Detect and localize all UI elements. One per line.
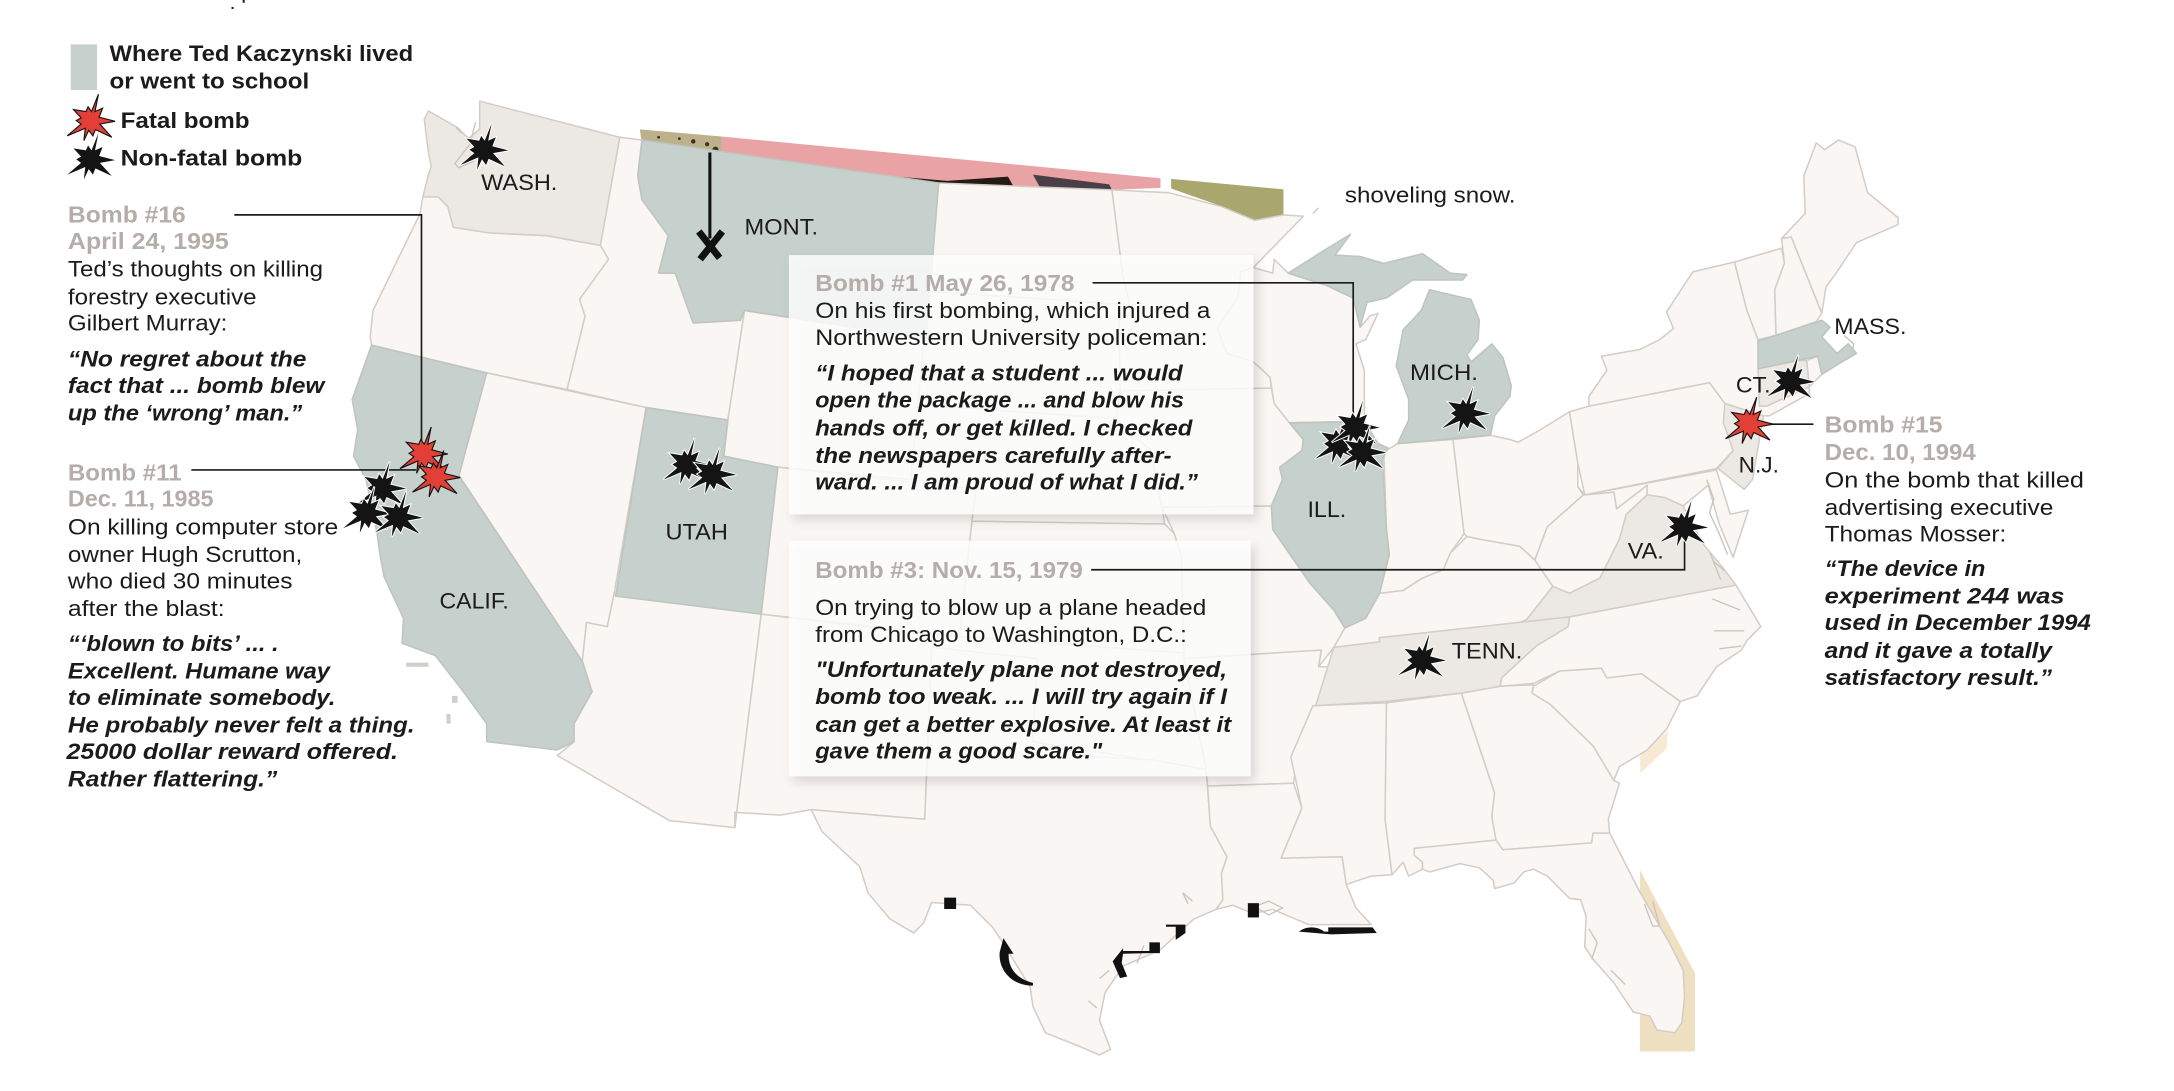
montana marker: arrow line and X [699, 152, 722, 259]
panel: bomb 11: to eliminate somebody. [68, 685, 336, 710]
panel: bomb 3: bomb too weak. ... I will try again if I [815, 684, 1228, 709]
state: Kentucky [1334, 536, 1553, 647]
panel: bomb 15: used in December 1994 [1825, 610, 2091, 635]
state: Washington [423, 101, 620, 245]
state: New Hampshire [1775, 237, 1822, 335]
bomb: Michigan [1442, 387, 1490, 433]
state: Mississippi [1281, 703, 1392, 884]
state: Nevada [459, 373, 646, 661]
panel: bomb 1: hands off, or get killed. I checked [815, 415, 1193, 440]
state: South Carolina [1532, 668, 1680, 780]
panel: bomb 15: satisfactory result.” [1825, 665, 2053, 690]
panel: bomb 3: gave them a good scare." [814, 738, 1103, 763]
panel: bomb 15: experiment 244 was [1825, 584, 2064, 609]
state: New York [1589, 262, 1809, 416]
state: Oregon [370, 197, 609, 390]
state labels: MASS. [1834, 314, 1906, 339]
legend text: lived: or went to school [110, 69, 309, 94]
state: Maine [1782, 140, 1898, 313]
state: Maryland and Delaware [1585, 470, 1748, 557]
state: Wisconsin [1217, 259, 1378, 423]
panel: bomb 15: Dec. 10, 1994 [1825, 439, 1976, 465]
panel: bomb 16: Bomb #16 [68, 201, 186, 227]
panel: bomb 15: advertising executive [1825, 495, 2053, 520]
state: Alabama [1385, 693, 1496, 876]
state: Missouri [1162, 506, 1345, 667]
panel: bomb 11: Rather flattering.” [68, 767, 278, 792]
legend text: non-fatal: Non-fatal bomb [121, 146, 302, 171]
state labels: MICH. [1410, 360, 1478, 385]
panel: bomb 3: "Unfortunately plane not destroyed, [815, 657, 1227, 682]
state: Idaho [567, 137, 745, 420]
bomb markers [343, 123, 1815, 680]
panel: bomb 16: Ted’s thoughts on killing [68, 257, 323, 282]
bomb: Illinois group [1315, 401, 1386, 472]
state: Arkansas [1184, 650, 1339, 786]
panel: bomb 11: He probably never felt a thing. [68, 713, 415, 738]
icon: non-fatal bomb [67, 133, 115, 179]
state: Florida [1414, 833, 1685, 1033]
islands [406, 663, 458, 724]
state labels: WASH. [481, 170, 557, 195]
icon: fatal bomb [67, 94, 115, 141]
panel: bomb 1: On his first bombing, which injured a [815, 298, 1211, 323]
panel: bomb 16: “No regret about the [68, 347, 306, 372]
state: Oklahoma [932, 635, 1206, 769]
state: Utah [616, 408, 778, 614]
state: Indiana [1380, 439, 1464, 593]
panel: bomb 1: Northwestern University policeman: [815, 325, 1208, 350]
panel: bomb 16: Gilbert Murray: [68, 311, 227, 336]
stray caption fragment: shoveling snow. [1345, 182, 1515, 207]
panel: bomb 1: the newspapers carefully after- [815, 443, 1172, 468]
state labels: VA. [1628, 539, 1664, 564]
panel: bomb 15 [1825, 412, 2091, 690]
state labels: ILL. [1307, 497, 1346, 522]
state: North Dakota [929, 183, 1130, 305]
bomb: Connecticut [1767, 355, 1815, 401]
state labels: CALIF. [440, 589, 509, 614]
panel: bomb 11: On killing computer store [68, 514, 338, 539]
panel: bomb 1: “I hoped that a student ... would [815, 361, 1183, 386]
state: Wyoming [724, 311, 926, 480]
bomb: Virginia [1660, 500, 1708, 547]
bomb: California non-fatal group [343, 462, 423, 537]
state labels: TENN. [1452, 638, 1522, 663]
top edge specks [232, 0, 245, 9]
panel: bomb 11: who died 30 minutes [67, 568, 293, 593]
state: Illinois [1271, 421, 1389, 628]
bomb: Utah group [663, 438, 736, 494]
panel: bomb 1: open the package ... and blow his [815, 388, 1184, 413]
panel: bomb 11: 25000 dollar reward offered. [65, 739, 398, 764]
panel: bomb 15: On the bomb that killed [1825, 467, 2084, 492]
panel: bomb 1 [789, 255, 1253, 514]
panel: bomb 3: can get a better explosive. At least it [815, 712, 1233, 737]
state: Montana [638, 140, 939, 338]
state: Georgia [1461, 685, 1619, 850]
panel: bomb 1: ward. ... I am proud of what I did.” [815, 469, 1199, 494]
bomb: Tennessee [1398, 634, 1446, 680]
state: New Mexico [735, 614, 932, 828]
panel: bomb 15: “The device in [1825, 556, 1985, 581]
state: Nebraska [911, 405, 1165, 524]
text fragments on the gulf coast [944, 898, 1377, 986]
state labels: CT. [1736, 372, 1771, 397]
leader lines [191, 215, 1814, 570]
panel: bomb 11: after the blast: [68, 596, 225, 621]
panel: bomb 15: Bomb #15 [1825, 412, 1943, 438]
panel: bomb 3: from Chicago to Washington, D.C.: [815, 622, 1187, 647]
state: Kansas [959, 521, 1184, 653]
coastal detail [455, 122, 1854, 1008]
panel: bomb 11: Dec. 11, 1985 [68, 486, 214, 512]
state: Vermont [1734, 248, 1784, 340]
state: North Carolina [1500, 585, 1761, 701]
bomb: New Jersey fatal [1725, 397, 1773, 443]
state labels [440, 170, 1906, 663]
panel: bomb 11: Bomb #11 [68, 459, 182, 485]
state: Louisiana [1208, 783, 1371, 925]
state: South Dakota [918, 291, 1130, 419]
state: Massachusetts [1758, 320, 1856, 374]
panel: bomb 3: Bomb #3: Nov. 15, 1979 [815, 557, 1083, 583]
panel: bomb 3: On trying to blow up a plane headed [815, 595, 1206, 620]
bomb: Washington [460, 123, 508, 170]
bomb: California fatal group [400, 427, 460, 497]
state labels: UTAH [666, 519, 728, 544]
state: New Jersey [1718, 403, 1764, 489]
panel: bomb 16: up the ‘wrong’ man.” [68, 401, 303, 426]
legend swatch [71, 44, 97, 90]
map: contiguous United States [352, 101, 1898, 1055]
legend text: lived: Where Ted Kaczynski lived [110, 41, 413, 66]
state: California [352, 345, 592, 750]
state: Virginia [1513, 495, 1736, 625]
state labels: N.J. [1739, 453, 1779, 478]
panel: bomb 16: forestry executive [68, 284, 256, 309]
state: West Virginia [1535, 485, 1647, 593]
legend text: fatal: Fatal bomb [121, 108, 250, 133]
state: Michigan [1288, 234, 1511, 444]
panel: bomb 15: Thomas Mosser: [1825, 521, 2006, 546]
panel: bomb 16 [68, 201, 326, 426]
state: Tennessee [1316, 617, 1569, 706]
state labels: MONT. [745, 214, 818, 239]
panel: bomb 16: fact that ... bomb blew [68, 373, 326, 398]
panel: bomb 11: owner Hugh Scrutton, [68, 542, 302, 567]
state: Iowa [1116, 388, 1303, 507]
state: Minnesota [1112, 190, 1303, 391]
legend text: lived [110, 41, 413, 94]
panel: bomb 11: “‘blown to bits’ ... . [68, 631, 279, 656]
panel: bomb 11: Excellent. Humane way [68, 659, 332, 684]
state: Connecticut [1758, 360, 1809, 406]
legend [67, 41, 413, 179]
panel: bomb 3 [789, 541, 1251, 776]
panel: bomb 11 [65, 459, 415, 792]
panel: bomb 15: and it gave a totally [1825, 638, 2054, 663]
state: Colorado [761, 467, 976, 636]
state: Rhode Island [1807, 356, 1822, 387]
panel: bomb 1: Bomb #1 May 26, 1978 [815, 270, 1075, 296]
state: Texas [811, 647, 1227, 1055]
photo fragments showing through the map [640, 129, 1695, 1051]
state: Arizona [557, 593, 761, 828]
state: Ohio [1453, 412, 1583, 560]
panel: bomb 16: April 24, 1995 [68, 228, 229, 254]
state: Pennsylvania [1569, 383, 1733, 495]
